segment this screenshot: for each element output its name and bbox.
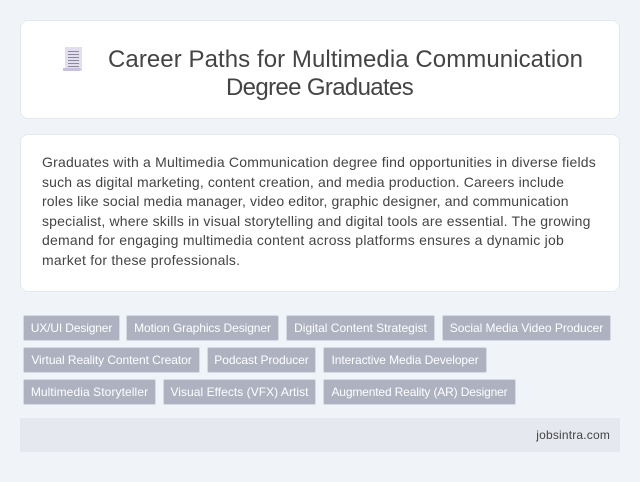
panel: title card — [20, 20, 620, 119]
footer bar — [20, 418, 620, 452]
panel: description — [20, 134, 620, 292]
tag — [126, 315, 279, 341]
description text: demand for engaging multimedia content across platforms ensures a dynamic job — [42, 232, 564, 248]
description text: roles like social media manager, video editor, graphic designer, and communication — [42, 193, 569, 209]
tag — [207, 347, 316, 373]
tag: Augmented Reality (AR) Designer — [331, 385, 508, 399]
description text: specialist, where skills in visual storytelling and digital tools are essential. The growing — [42, 213, 591, 229]
tag: Visual Effects (VFX) Artist — [170, 385, 308, 399]
tag — [323, 347, 487, 373]
tag — [23, 379, 156, 405]
description text — [42, 154, 596, 268]
footer source: jobsintra.com — [536, 428, 610, 442]
tag: Virtual Reality Content Creator — [31, 353, 192, 367]
tag: Digital Content Strategist — [294, 321, 427, 335]
tag — [286, 315, 435, 341]
tag: UX/UI Designer — [31, 321, 112, 335]
tag: Podcast Producer — [214, 353, 309, 367]
tags group — [23, 315, 611, 405]
tag — [23, 315, 120, 341]
tag — [323, 379, 516, 405]
icon: document scroll — [63, 47, 82, 71]
description text: Graduates with a Multimedia Communication degree find opportunities in diverse fields — [42, 154, 596, 170]
tag: Interactive Media Developer — [332, 353, 478, 367]
tag — [23, 347, 200, 373]
title: Degree Graduates — [226, 74, 413, 101]
tag: Multimedia Storyteller — [31, 385, 148, 399]
tag — [163, 379, 316, 405]
tag — [442, 315, 611, 341]
title: Career Paths for Multimedia Communication — [108, 46, 583, 73]
tag: Motion Graphics Designer — [134, 321, 271, 335]
title — [108, 46, 583, 101]
description text: market for these professionals. — [42, 252, 240, 268]
description text: such as digital marketing, content creation, and media production. Careers include — [42, 174, 564, 190]
tag: Social Media Video Producer — [450, 321, 603, 335]
